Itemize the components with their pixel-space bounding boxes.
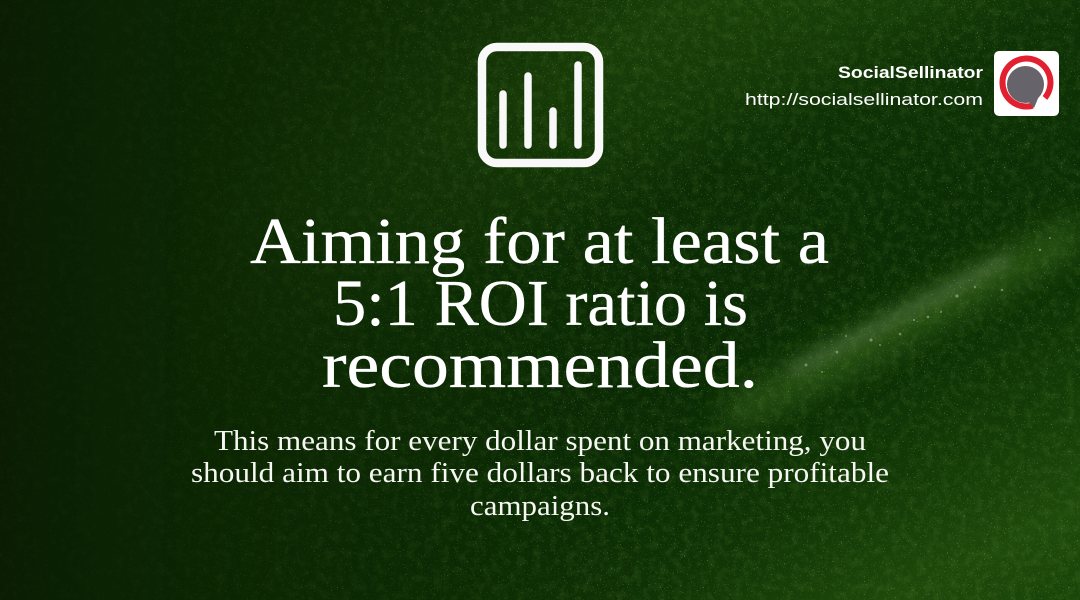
heading: [250, 205, 829, 402]
icon: bar chart in rounded square: [482, 47, 599, 163]
heading: recommended.: [322, 329, 758, 402]
body text: campaigns.: [470, 491, 610, 522]
body text: should aim to earn five dollars back to ensure profitable: [191, 458, 889, 489]
brand url: http://socialsellinator.com: [745, 90, 983, 109]
heading: Aiming for at least a: [250, 205, 829, 278]
body text: [191, 426, 889, 522]
heading: 5:1 ROI ratio is: [333, 267, 748, 340]
brand name: SocialSellinator: [838, 63, 983, 82]
logo: red ring with grey speech bubble: [994, 51, 1059, 116]
brand block: SocialSellinator: [745, 51, 1059, 116]
body text: This means for every dollar spent on marketing, you: [214, 426, 866, 457]
